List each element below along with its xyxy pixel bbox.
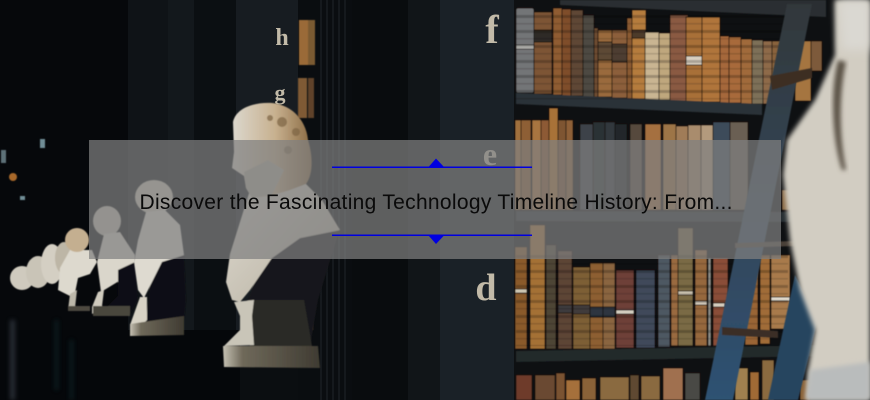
shelf: middle <box>516 93 762 115</box>
bust: hair curls <box>267 115 300 154</box>
ladder: second rail <box>768 275 818 400</box>
column letters: f <box>485 7 499 52</box>
shelf: lower <box>516 211 792 222</box>
column letters <box>274 7 499 309</box>
floor reflections <box>10 320 73 400</box>
statue bust: large foreground <box>223 103 340 368</box>
foreground statue: blurred right <box>783 0 870 400</box>
books: second row <box>515 108 794 210</box>
shelf: top <box>560 0 826 17</box>
books: top row <box>516 8 822 104</box>
title text: Discover the Fascinating Technology Timeline History: From... <box>140 191 732 214</box>
lights in the distance <box>1 139 45 200</box>
statue bust: third <box>92 206 138 316</box>
ladder: top rung <box>770 68 812 90</box>
bust: plinth <box>223 346 320 368</box>
statue bust: far cluster <box>10 228 97 311</box>
shelf: bottom <box>516 345 825 362</box>
top divider with triangle <box>332 158 532 168</box>
book spine bands <box>516 10 788 346</box>
bust: dark pedestal <box>247 228 340 347</box>
bookshelf: right side <box>515 0 826 400</box>
bust: head <box>232 103 312 198</box>
bust: beard <box>244 160 284 198</box>
ladder: lower rung <box>722 327 778 338</box>
translucent title band <box>89 140 781 259</box>
bust: draped chest <box>226 178 340 302</box>
ladder: main rail <box>705 4 812 400</box>
column letters: e <box>483 136 497 172</box>
bust: stem <box>224 300 254 346</box>
column letters: d <box>475 267 497 309</box>
ladder: middle rung <box>735 241 795 248</box>
narrow book strip behind big bust <box>298 20 315 330</box>
statue bust: second <box>130 180 186 336</box>
bottom divider with triangle <box>332 234 532 244</box>
column letters: h <box>275 25 289 51</box>
books: third row <box>515 225 790 349</box>
books: bottom row <box>516 360 810 400</box>
ladder <box>705 4 818 400</box>
column letters: g <box>274 80 286 105</box>
